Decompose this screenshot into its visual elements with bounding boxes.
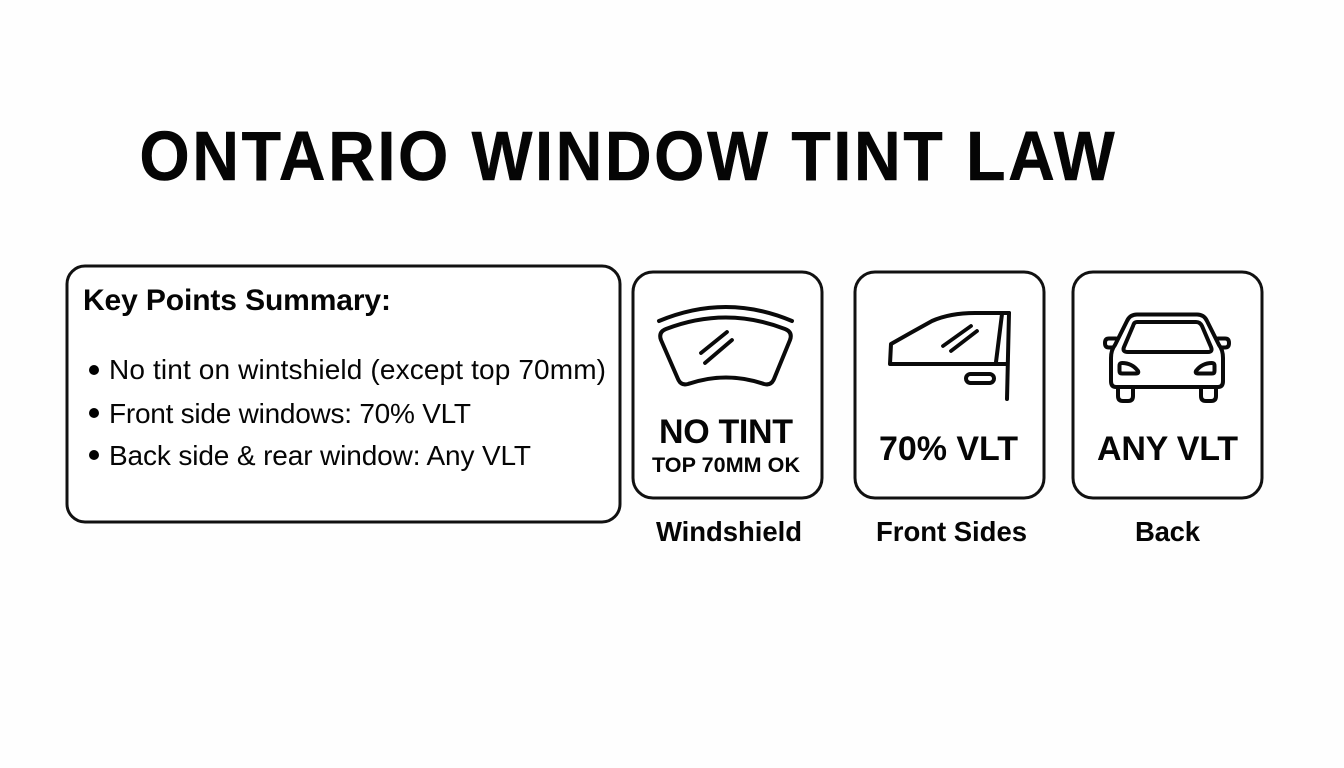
bullet list: Back side & rear window: Any VLT [109, 440, 531, 471]
icon: car door [890, 313, 1009, 399]
heading: key points summary: Key Points Summary: [83, 284, 391, 317]
caption: front sides: Front Sides [876, 516, 1027, 547]
panel: windshield [633, 272, 822, 498]
bullet list [89, 354, 606, 471]
panel: front sides [855, 272, 1044, 498]
icon: windshield [659, 307, 792, 384]
label: no tint: NO TINT [659, 413, 793, 451]
caption: windshield: Windshield [656, 516, 802, 547]
caption: back: Back [1135, 516, 1201, 547]
label: any vlt: ANY VLT [1097, 430, 1238, 468]
label: top 70mm ok: TOP 70MM OK [652, 453, 800, 477]
title: ONTARIO WINDOW TINT LAW [140, 118, 1115, 196]
panel: key points summary [67, 266, 620, 522]
bullet list: Front side windows: 70% VLT [109, 398, 471, 429]
bullet list: No tint on wintshield (except top 70mm) [109, 354, 606, 385]
label: 70% vlt: 70% VLT [879, 430, 1018, 468]
icon: car front [1105, 314, 1229, 401]
panel: back [1073, 272, 1262, 498]
